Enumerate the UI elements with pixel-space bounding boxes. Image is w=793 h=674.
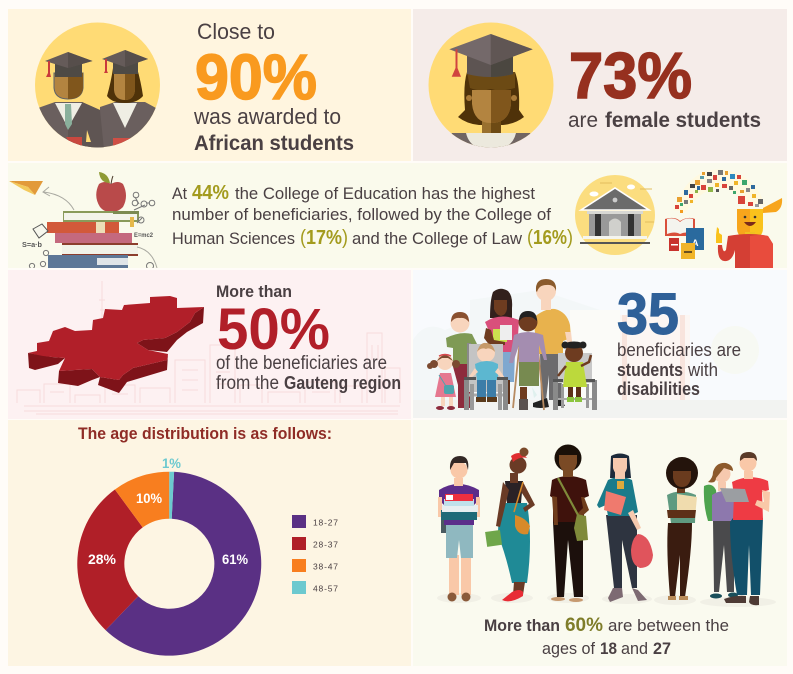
text: colleges paragraph xyxy=(172,182,573,249)
text: ages of 18 and 27: and xyxy=(621,639,648,658)
boy on crutches xyxy=(509,311,547,410)
panel: age distribution xyxy=(8,420,411,666)
tall man xyxy=(533,279,573,408)
text: more than 60%: More than xyxy=(484,616,560,635)
formula: S=a·b: S=a·b xyxy=(22,242,42,249)
heading: age distribution: The age distribution is as follows: xyxy=(78,424,332,443)
icon: paper plane xyxy=(9,181,43,195)
text: colleges paragraph: ) xyxy=(567,227,573,249)
label: 61%: 61% xyxy=(222,551,249,567)
student 3 xyxy=(550,444,589,602)
text: from the Gauteng region: Gauteng region xyxy=(284,373,401,393)
chart: donut xyxy=(77,455,261,656)
background: city skyline xyxy=(17,281,400,414)
background: school xyxy=(413,290,787,418)
boy in wheelchair xyxy=(464,343,508,410)
text: from the Gauteng region xyxy=(216,373,401,394)
boy in green xyxy=(446,312,477,408)
text: colleges paragraph: the College of Education has the highest xyxy=(235,184,535,203)
label: 1%: 1% xyxy=(162,455,182,471)
text: colleges paragraph: ( xyxy=(527,227,533,249)
text: ages of 18 and 27: 18 xyxy=(600,639,617,658)
text: colleges paragraph: 17% xyxy=(306,227,342,249)
arrow: curved xyxy=(43,187,74,210)
icon: college building xyxy=(575,175,655,255)
legend: 38-47 xyxy=(313,562,338,572)
text: of the beneficiaries are: of the beneficiaries are xyxy=(216,353,387,374)
student 5 xyxy=(666,457,698,600)
number: 90%: 90% xyxy=(195,41,317,113)
label: 10%: 10% xyxy=(136,490,163,506)
legend: 28-37 xyxy=(313,540,338,550)
number: 50%: 50% xyxy=(217,297,330,362)
text: are female students: are xyxy=(568,109,598,132)
icon: student with ideas: A xyxy=(692,238,699,248)
text: colleges paragraph: Human Sciences xyxy=(172,229,295,248)
icon: student with ideas xyxy=(665,170,782,268)
text: more than 60% xyxy=(484,615,729,636)
student 6 xyxy=(704,463,738,598)
woman with books xyxy=(484,289,519,404)
text: ages of 18 and 27 xyxy=(542,639,671,658)
text: colleges paragraph: and the College of Law xyxy=(352,229,523,248)
girl with bag xyxy=(427,354,460,410)
shadows xyxy=(437,593,776,607)
panel: colleges xyxy=(8,163,787,270)
text: students with: students xyxy=(617,360,683,380)
text: colleges paragraph: 16% xyxy=(533,227,567,249)
heading: close to: Close to xyxy=(197,19,275,44)
text: beneficiaries are: beneficiaries are xyxy=(617,340,741,360)
text: ages of 18 and 27: ages of xyxy=(542,639,595,658)
girl in wheelchair xyxy=(553,342,597,410)
text: colleges paragraph: 44% xyxy=(192,182,229,204)
student 4 xyxy=(597,454,653,602)
icon: books and apple xyxy=(29,172,157,270)
number: 35: 35 xyxy=(617,282,679,347)
panel: disabilities xyxy=(413,270,787,418)
formula: E=mc2: E=mc2 xyxy=(134,233,154,239)
text: are female students: female students xyxy=(605,109,761,132)
text: disabilities: disabilities xyxy=(617,379,700,399)
text: more than 60%: 60% xyxy=(565,615,603,636)
text: colleges paragraph: number of beneficiaries, followed by the College of xyxy=(172,205,551,224)
number: 73%: 73% xyxy=(569,39,692,112)
text: African students: African students xyxy=(194,132,354,155)
legend: 18-27 xyxy=(313,518,338,528)
student 1 xyxy=(438,456,480,602)
panel: Gauteng xyxy=(8,270,411,419)
icon: female graduate xyxy=(428,22,554,150)
figures: family group xyxy=(427,279,597,410)
map: Gauteng region xyxy=(28,296,204,393)
text: ages of 18 and 27: 27 xyxy=(653,639,671,658)
text: colleges paragraph: ) xyxy=(342,227,348,249)
text: colleges paragraph: At xyxy=(172,184,187,203)
student 2 xyxy=(485,448,535,601)
panel: young students xyxy=(413,420,787,666)
legend: 48-57 xyxy=(313,584,338,594)
icon: two graduates xyxy=(35,22,160,150)
label: 28%: 28% xyxy=(88,551,117,567)
legend xyxy=(292,515,338,594)
text: more than 60%: are between the xyxy=(608,616,729,635)
text: was awarded to: was awarded to xyxy=(193,104,341,129)
text: colleges paragraph: ( xyxy=(300,227,306,249)
panel: female students xyxy=(413,9,787,161)
text: more than: More than xyxy=(216,282,292,301)
text: from the Gauteng region: from the xyxy=(216,373,279,394)
text: students with: with xyxy=(687,360,718,380)
panel: African students xyxy=(8,9,411,161)
student 7 xyxy=(720,452,770,605)
